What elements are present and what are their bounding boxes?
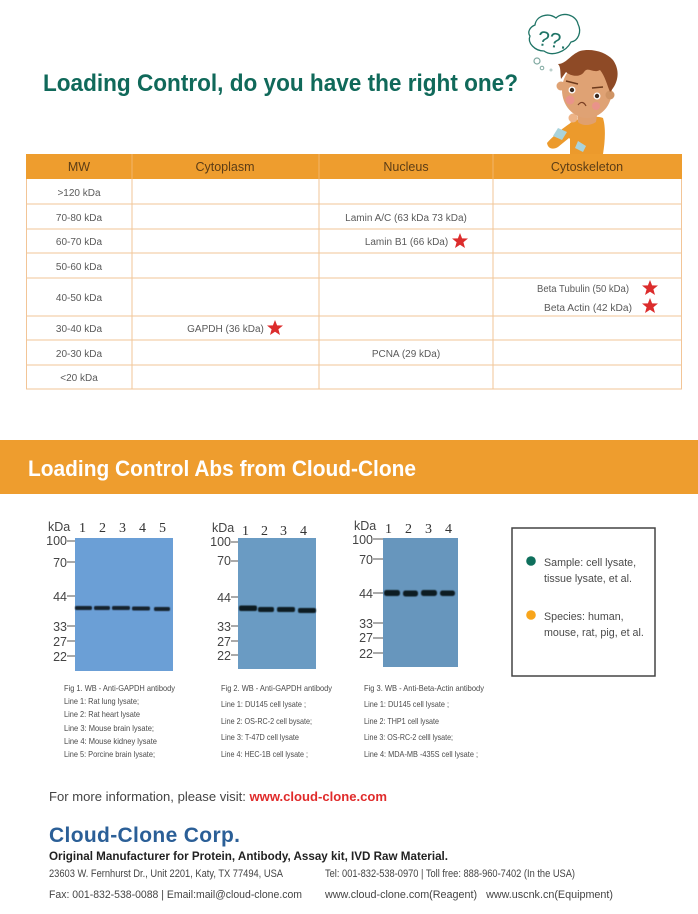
- caption: figure 3: Line 1: DU145 cell lysate ;: [364, 699, 449, 709]
- contact details: www.cloud-clone.com(Reagent) www.uscnk.cn(Equipment): [324, 889, 613, 901]
- table entries: Beta Tubulin (50 kDa): [537, 284, 629, 295]
- western blot figure 1: kDa: [48, 520, 70, 534]
- caption: figure 3: Line 2: THP1 cell lysate: [364, 716, 439, 726]
- legend box: [512, 528, 655, 676]
- eyes: [568, 86, 576, 94]
- caption: figure 1: Line 1: Rat lung lysate;: [64, 696, 139, 706]
- company tagline: Original Manufacturer for Protein, Antibody, Assay kit, IVD Raw Material.: [49, 851, 448, 863]
- table entries: Lamin A/C (63 kDa 73 kDa): [345, 213, 467, 224]
- molecular weight column: 50-60 kDa: [56, 262, 103, 273]
- company name: Cloud-Clone Corp.: [49, 824, 240, 847]
- western blot figure 1: 33: [53, 620, 67, 634]
- caption: figure 1: Line 2: Rat heart lysate: [64, 709, 140, 719]
- western blot figure 2: 1: [242, 524, 249, 539]
- molecular weight column: 20-30 kDa: [56, 349, 103, 360]
- caption: figure 1: Line 5: Porcine brain lysate;: [64, 749, 155, 759]
- section banner: Loading Control Abs from Cloud-Clone: [28, 456, 416, 481]
- cheeks: [566, 96, 574, 104]
- caption: figure 1: [64, 683, 176, 759]
- table header: Cytoplasm: [195, 160, 255, 174]
- title: Loading Control, do you have the right one?: [43, 70, 518, 97]
- caption: figure 3: [364, 683, 485, 759]
- western blot figure 3: 100: [352, 533, 373, 547]
- legend box: Sample: cell lysate,: [544, 557, 636, 569]
- western blot figure 2: 27: [217, 635, 231, 649]
- western blot figure 1: 1: [79, 521, 86, 536]
- western blot figure 3: 22: [359, 647, 373, 661]
- table entries: PCNA (29 kDa): [372, 349, 440, 360]
- caption: figure 3: Line 3: OS-RC-2 celll lysate;: [364, 732, 453, 742]
- table entries: Beta Actin (42 kDa): [544, 303, 632, 314]
- table header: [26, 154, 682, 179]
- section banner: [0, 440, 698, 494]
- caption: figure 3: Line 4: MDA-MB -435S cell lysate ;: [364, 749, 478, 759]
- caption: figure 2: Fig 2. WB - Anti-GAPDH antibody: [221, 683, 333, 693]
- website call to action: For more information, please visit: www.cloud-clone.com: [49, 789, 387, 804]
- molecular weight column: 60-70 kDa: [56, 237, 103, 248]
- caption: figure 1: Fig 1. WB - Anti-GAPDH antibody: [64, 683, 176, 693]
- western blot figure 3: 3: [425, 522, 432, 537]
- table header: MW: [68, 160, 90, 174]
- caption: figure 2: Line 3: T-47D cell lysate: [221, 732, 299, 742]
- mouth: [578, 102, 586, 106]
- table: loading controls by molecular weight and location: [26, 154, 682, 389]
- western blot figure 3: kDa: [354, 519, 376, 533]
- western blot figure 1: 44: [53, 590, 67, 604]
- western blot figure 2: 100: [210, 535, 231, 549]
- caption: figure 2: Line 1: DU145 cell lysate ;: [221, 699, 306, 709]
- molecular weight column: 30-40 kDa: [56, 324, 103, 335]
- molecular weight column: >120 kDa: [57, 188, 101, 199]
- western blot figure 2: 70: [217, 554, 231, 568]
- western blot figure 3: 4: [445, 522, 452, 537]
- western blot figure 1: [46, 520, 173, 671]
- western blot figure 3: 27: [359, 631, 373, 645]
- western blot figure 1: 22: [53, 650, 67, 664]
- caption: figure 2: [221, 683, 333, 759]
- western blot figure 3: [352, 519, 458, 667]
- legend box: Species: human,: [544, 611, 624, 623]
- western blot figure 2: 4: [300, 524, 307, 539]
- molecular weight column: 70-80 kDa: [56, 213, 103, 224]
- legend box: mouse, rat, pig, et al.: [544, 627, 644, 639]
- western blot figure 1: 2: [99, 521, 106, 536]
- contact details: Fax: 001-832-538-0088 | Email:mail@cloud-clone.com: [49, 889, 302, 901]
- western blot figure 1: 3: [119, 521, 126, 536]
- western blot figure 2: kDa: [212, 521, 234, 535]
- western blot figure 3: 2: [405, 522, 412, 537]
- table entries: GAPDH (36 kDa): [187, 324, 264, 335]
- western blot figure 1: 27: [53, 635, 67, 649]
- shirt: [570, 117, 605, 154]
- neck and hand: [577, 108, 598, 125]
- table entries: Lamin B1 (66 kDa): [365, 237, 448, 248]
- molecular weight column: <20 kDa: [60, 373, 98, 384]
- molecular weight column: [56, 188, 103, 384]
- thought bubble: ??.: [536, 27, 568, 54]
- western blot figure 1: 5: [159, 521, 166, 536]
- western blot figure 2: 2: [261, 524, 268, 539]
- western blot figure 3: 44: [359, 587, 373, 601]
- icon: thinking boy with thought bubble: [529, 14, 618, 154]
- caption: figure 3: Fig 3. WB - Anti-Beta-Actin antibody: [364, 683, 485, 693]
- caption: figure 1: Line 3: Mouse brain lysate;: [64, 723, 154, 733]
- table header: Cytoskeleton: [551, 160, 623, 174]
- western blot figure 1: 70: [53, 556, 67, 570]
- western blot figure 1: 4: [139, 521, 146, 536]
- western blot figure 2: 3: [280, 524, 287, 539]
- western blot figure 2: 22: [217, 649, 231, 663]
- western blot figure 3: 1: [385, 522, 392, 537]
- contact details: 23603 W. Fernhurst Dr., Unit 2201, Katy, TX 77494, USA: [49, 868, 284, 880]
- contact details: [49, 868, 613, 901]
- hair: [558, 50, 618, 92]
- arm: [547, 122, 593, 152]
- western blot figure 3: 33: [359, 617, 373, 631]
- molecular weight column: 40-50 kDa: [56, 293, 103, 304]
- caption: figure 2: Line 2: OS-RC-2 cell bysate;: [221, 716, 312, 726]
- table header: Nucleus: [383, 160, 429, 174]
- western blot figure 2: [210, 521, 316, 669]
- western blot figure 3: 70: [359, 553, 373, 567]
- contact details: Tel: 001-832-538-0970 | Toll free: 888-960-7402 (In the USA): [325, 868, 575, 880]
- western blot figure 1: 100: [46, 534, 67, 548]
- western blot figure 2: 33: [217, 620, 231, 634]
- head: [562, 62, 612, 118]
- table entries: [187, 213, 658, 360]
- western blot figure 2: 44: [217, 591, 231, 605]
- caption: figure 1: Line 4: Mouse kidney lysate: [64, 736, 157, 746]
- legend box: tissue lysate, et al.: [544, 573, 632, 585]
- caption: figure 2: Line 4: HEC-1B cell lysate ;: [221, 749, 308, 759]
